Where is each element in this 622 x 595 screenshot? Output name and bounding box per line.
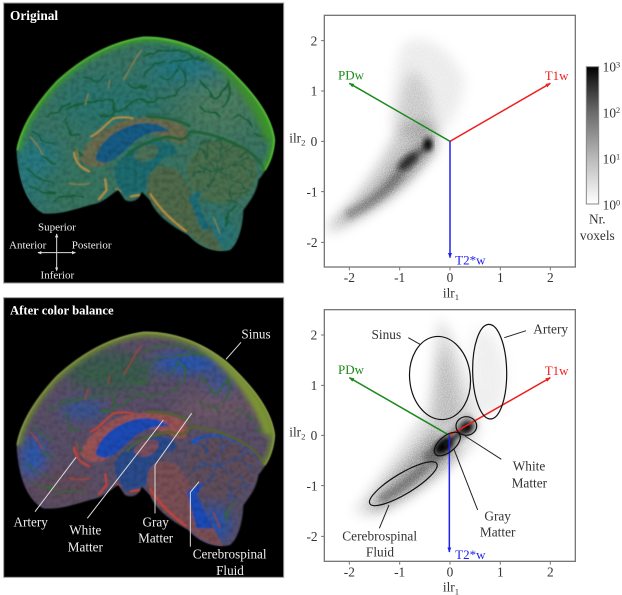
x and y tick labels: -2: [306, 529, 318, 544]
arrow: T2*w: T2*w: [455, 547, 486, 562]
axis title: ilr2: 2: [301, 137, 305, 147]
density cloud: [325, 39, 465, 232]
x and y tick labels: -1: [394, 270, 405, 285]
x and y tick labels: -1: [306, 184, 318, 199]
x and y tick labels: 0: [447, 564, 454, 579]
x and y tick labels: [306, 33, 554, 285]
label: White Matter: White: [69, 523, 102, 538]
label: Gray Matter: Gray: [143, 514, 169, 529]
panel: original brain rendering: [0, 0, 290, 283]
panel: color balanced brain rendering: [0, 295, 290, 578]
compass labels: Inferior: [41, 270, 74, 282]
compass labels: Posterior: [72, 240, 112, 252]
x and y tick labels: 2: [311, 33, 317, 48]
arrow: PDw: PDw: [338, 362, 365, 377]
callout: Cerebrospinal Fluid: Cerebrospinal: [342, 528, 417, 543]
panel background: [4, 3, 284, 283]
label: Gray Matter: Matter: [138, 531, 174, 546]
callout: Sinus: [372, 327, 475, 423]
density cloud: [353, 318, 506, 517]
arrow: PDw: PDw: [338, 67, 365, 82]
label: White Matter: [68, 420, 163, 555]
x and y tick labels: 2: [547, 270, 554, 285]
compass labels: [9, 222, 112, 282]
callout: Artery: [472, 321, 568, 419]
callout: Cerebrospinal Fluid: [342, 455, 442, 560]
callout: Gray Matter: Gray: [484, 508, 511, 523]
arrow: T2*w: [449, 435, 486, 562]
callout: Cerebrospinal Fluid: Fluid: [366, 545, 394, 560]
axis title: ilr2: ilr: [289, 425, 301, 440]
compass labels: Anterior: [9, 240, 47, 252]
callout: White Matter: Matter: [512, 476, 548, 491]
label: Gray Matter: [138, 413, 192, 546]
axis title: ilr1: 1: [455, 292, 459, 302]
axes frame and ticks: [321, 310, 575, 565]
x and y tick labels: -1: [394, 564, 405, 579]
arrow: T2*w: [450, 141, 486, 267]
axes frame and ticks: [321, 15, 575, 270]
x and y tick labels: [306, 328, 554, 579]
colorbar tick labels: 10: [603, 105, 616, 120]
callout: White Matter: [456, 417, 548, 491]
callout: White Matter: White: [513, 459, 545, 474]
label: Artery: [13, 457, 76, 529]
callout: Sinus: Sinus: [372, 327, 401, 342]
colorbar tick labels: 10: [603, 198, 616, 213]
heading: Original: Original: [10, 8, 58, 23]
label: Cerebrospinal Fluid: Fluid: [216, 563, 244, 578]
x and y tick labels: 2: [311, 328, 317, 343]
colorbar title: Nr.: [589, 212, 606, 227]
x and y tick labels: -2: [306, 235, 318, 250]
label: Sinus: [226, 326, 271, 359]
colorbar tick labels: [603, 60, 620, 213]
x and y tick labels: 1: [311, 84, 317, 99]
x and y tick labels: 0: [447, 270, 454, 285]
x and y tick labels: -2: [344, 270, 355, 285]
colorbar legend: [580, 60, 620, 243]
colorbar tick labels: 10: [603, 152, 616, 167]
image: brain after color balance: [16, 330, 276, 547]
x and y tick labels: 0: [311, 134, 318, 149]
arrow: T1w: T1w: [545, 363, 569, 378]
colorbar tick labels: 0: [616, 198, 620, 207]
x and y tick labels: 0: [311, 428, 318, 443]
label: Artery: Artery: [13, 514, 48, 529]
arrow: T1w: T1w: [545, 68, 569, 83]
callout: Gray Matter: [430, 428, 516, 540]
image: brain before color balance: [16, 36, 276, 252]
callout: Artery: Artery: [533, 321, 568, 336]
axis title: ilr2: ilr: [289, 131, 301, 146]
panel background: [4, 298, 284, 577]
x and y tick labels: 1: [497, 564, 504, 579]
arrow: T2*w: T2*w: [455, 252, 486, 267]
colorbar title: voxels: [580, 228, 615, 243]
compass arrows: [38, 234, 75, 271]
x and y tick labels: 2: [547, 564, 554, 579]
x and y tick labels: 1: [497, 270, 504, 285]
compass labels: Superior: [38, 222, 76, 234]
panel: scatter plot after color balance: [289, 310, 575, 595]
colorbar tick labels: 1: [616, 152, 620, 161]
axis title: ilr1: ilr: [443, 285, 455, 300]
arrow: T1w: [450, 68, 569, 141]
colorbar ramp: [586, 67, 599, 204]
label: Cerebrospinal Fluid: [190, 482, 267, 578]
label: Cerebrospinal Fluid: Cerebrospinal: [193, 546, 267, 561]
x and y tick labels: 1: [311, 378, 317, 393]
colorbar tick labels: 10: [603, 60, 616, 75]
panel: scatter plot before color balance: [289, 15, 620, 302]
colorbar title: [580, 212, 615, 243]
arrow: T1w: [449, 363, 569, 435]
x and y tick labels: -1: [306, 478, 318, 493]
arrow: PDw: [338, 362, 449, 435]
axis title: ilr1: ilr: [443, 580, 455, 595]
heading: After color balance: After color balance: [10, 304, 114, 318]
orientation compass: [9, 222, 112, 282]
x and y tick labels: -2: [344, 564, 355, 579]
callout: Gray Matter: Matter: [480, 525, 516, 540]
arrow: PDw: [338, 67, 450, 141]
axis title: ilr2: 2: [301, 431, 305, 441]
label: White Matter: Matter: [68, 540, 103, 555]
colorbar tick labels: 2: [616, 106, 620, 115]
colorbar tick labels: 3: [616, 60, 620, 69]
label: Sinus: Sinus: [241, 326, 271, 341]
